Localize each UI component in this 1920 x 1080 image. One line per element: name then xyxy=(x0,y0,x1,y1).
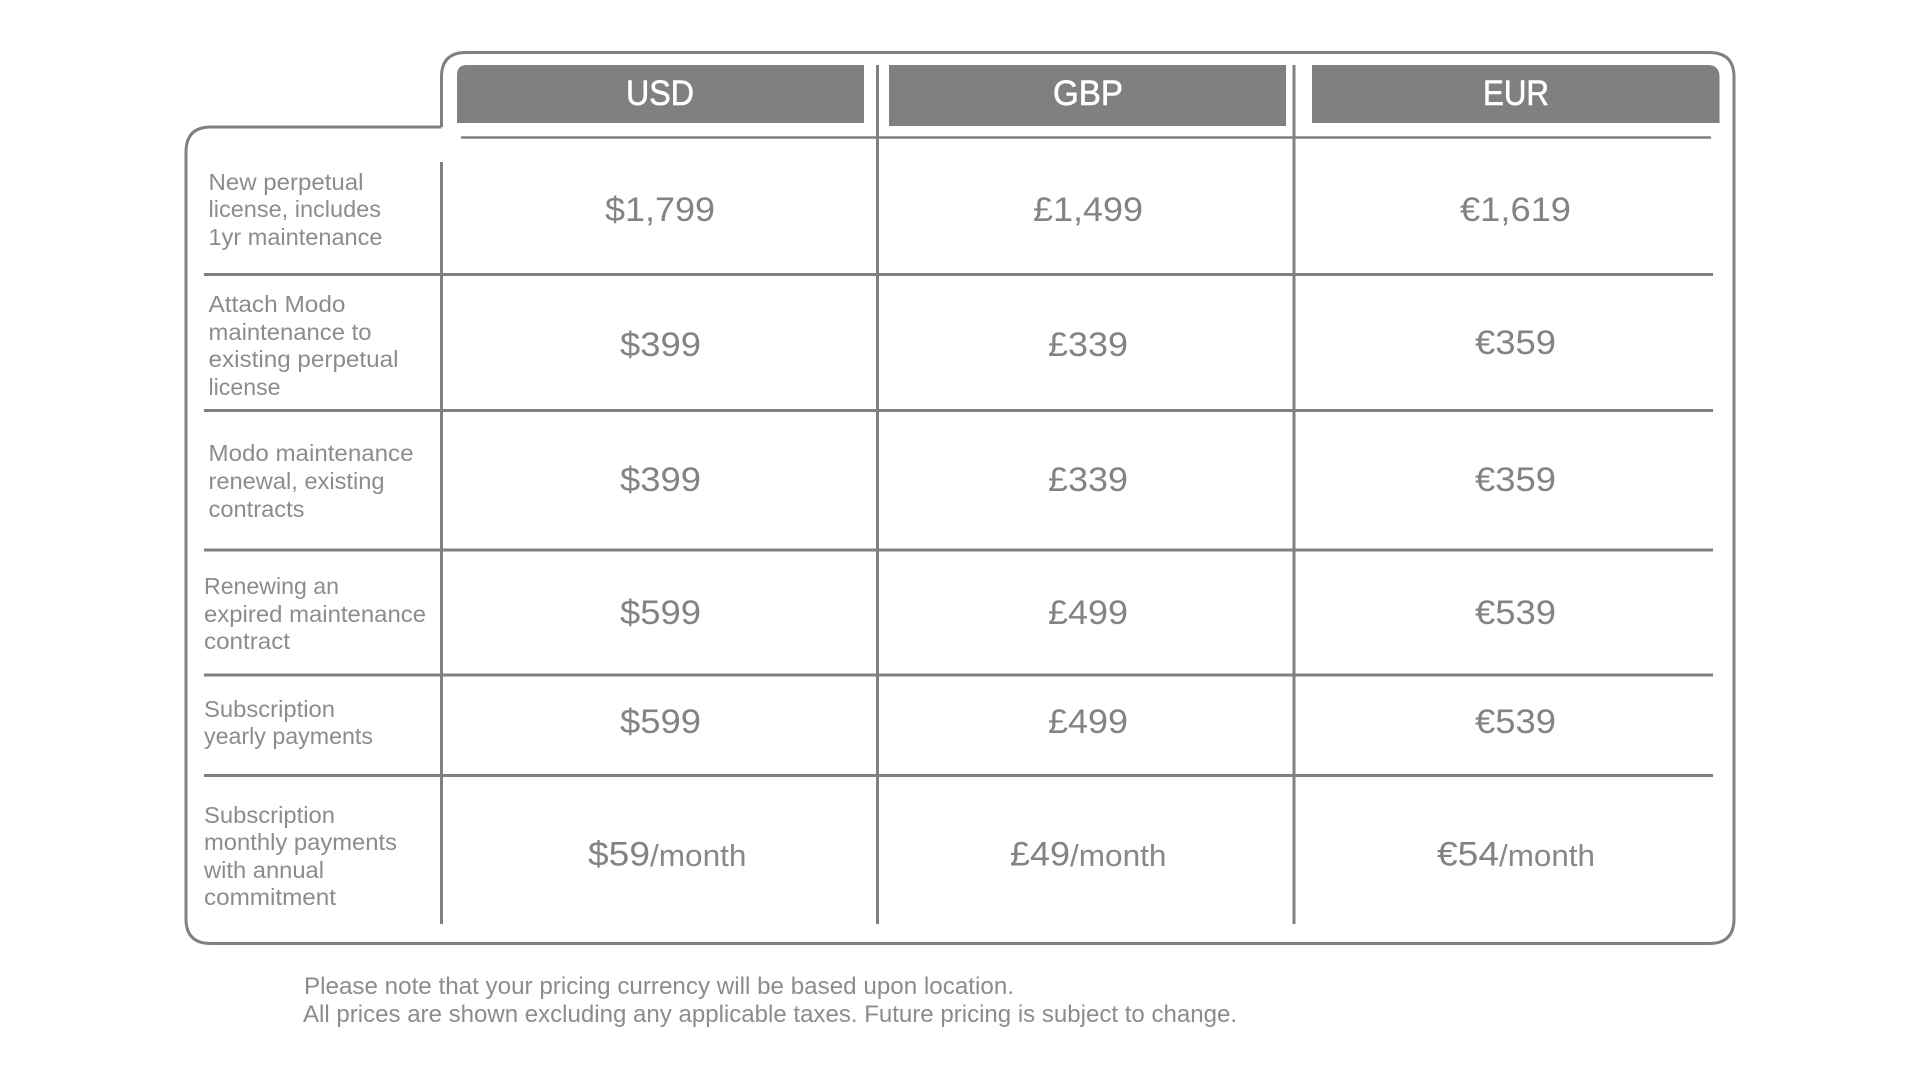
table grid lines xyxy=(204,65,1713,924)
row label: maintenance to xyxy=(208,319,372,345)
footnote xyxy=(303,973,1237,1028)
GBP price: £49 xyxy=(1010,836,1070,874)
row label xyxy=(204,573,426,654)
EUR price xyxy=(1437,836,1595,874)
GBP price xyxy=(1010,836,1166,874)
EUR price: €539 xyxy=(1475,594,1556,632)
row: maintenance renewal xyxy=(208,440,1556,522)
row label: Modo maintenance xyxy=(208,440,414,466)
row: renewing expired contract xyxy=(204,573,1556,654)
table outline xyxy=(186,52,1734,944)
header: EUR xyxy=(1312,65,1720,123)
header: GBP xyxy=(889,65,1286,126)
GBP price: £339 xyxy=(1048,461,1128,499)
row: subscription yearly xyxy=(204,696,1556,749)
header: EUR: EUR xyxy=(1483,74,1549,113)
row label: contract xyxy=(204,628,290,654)
USD price: $399 xyxy=(620,461,701,499)
row label: Renewing an xyxy=(204,573,339,599)
row label: Subscription xyxy=(204,696,335,722)
GBP price: /month xyxy=(1070,838,1166,873)
row label xyxy=(208,440,414,522)
row label: license, includes xyxy=(208,196,381,222)
header: USD: USD xyxy=(626,74,694,113)
row label: with annual xyxy=(203,857,324,883)
row label: yearly payments xyxy=(204,723,373,749)
row label: New perpetual xyxy=(208,169,364,195)
USD price: $59 xyxy=(588,836,650,874)
row label: commitment xyxy=(204,884,336,910)
row: new perpetual license xyxy=(208,169,1571,250)
row label xyxy=(204,696,373,749)
GBP price: £499 xyxy=(1048,594,1128,632)
USD price: /month xyxy=(650,838,746,873)
EUR price: €1,619 xyxy=(1460,191,1571,229)
row label xyxy=(208,291,398,400)
row label: renewal, existing xyxy=(208,468,384,494)
USD price: $599 xyxy=(620,703,701,741)
row label: 1yr maintenance xyxy=(208,224,382,250)
row label: license xyxy=(208,374,280,400)
EUR price: €359 xyxy=(1475,461,1556,499)
GBP price: £339 xyxy=(1048,326,1128,364)
USD price: $599 xyxy=(620,594,701,632)
row: subscription monthly xyxy=(203,802,1595,910)
row label: contracts xyxy=(208,496,304,522)
USD price: $1,799 xyxy=(605,191,715,229)
header: GBP: GBP xyxy=(1053,74,1123,113)
GBP price: £1,499 xyxy=(1033,191,1143,229)
footnote: Please note that your pricing currency will be based upon location. xyxy=(304,973,1014,1000)
row label xyxy=(208,169,382,250)
row label: existing perpetual xyxy=(208,346,398,372)
header: USD xyxy=(457,65,864,123)
row label xyxy=(203,802,397,910)
USD price xyxy=(588,836,746,874)
row label: Attach Modo xyxy=(208,291,346,317)
row: attach maintenance xyxy=(208,291,1556,400)
row label: Subscription xyxy=(204,802,335,828)
row label: monthly payments xyxy=(204,829,397,855)
EUR price: €54 xyxy=(1437,836,1499,874)
EUR price: /month xyxy=(1499,838,1595,873)
EUR price: €539 xyxy=(1475,703,1556,741)
EUR price: €359 xyxy=(1475,324,1556,362)
USD price: $399 xyxy=(620,326,701,364)
GBP price: £499 xyxy=(1048,703,1128,741)
row label: expired maintenance xyxy=(204,601,426,627)
footnote: All prices are shown excluding any applicable taxes. Future pricing is subject to change. xyxy=(303,1001,1237,1028)
